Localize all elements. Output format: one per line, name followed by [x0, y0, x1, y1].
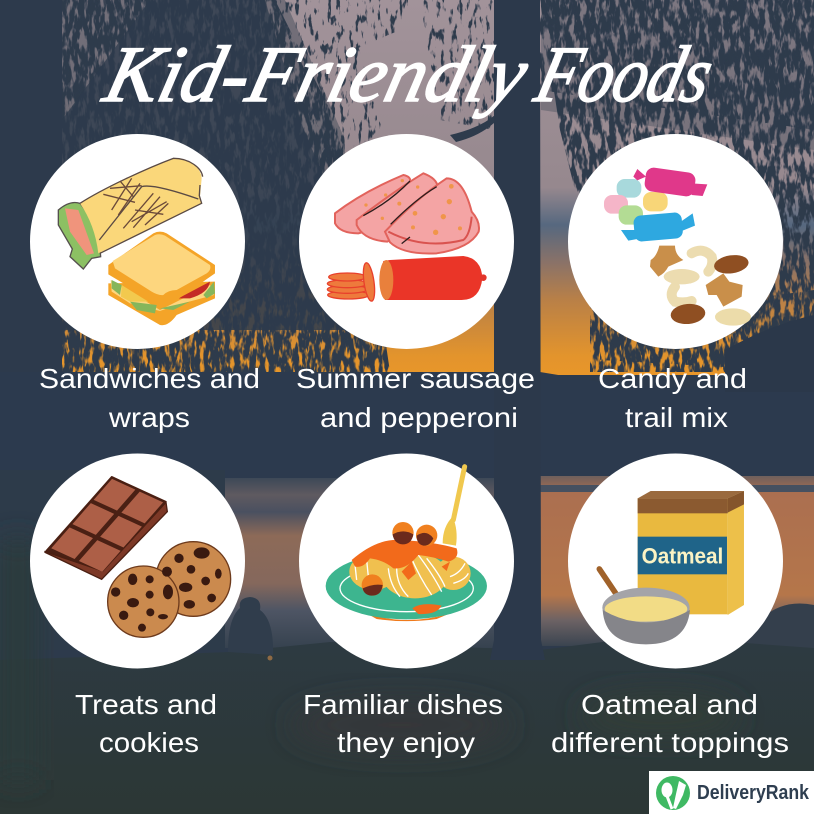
campfire glow [268, 656, 272, 660]
dark haze behind upper foliage [62, 0, 345, 330]
panel: summer sausage and pepperoni [296, 134, 535, 433]
icon: chocolate bar and cookies [45, 477, 231, 637]
label [303, 689, 503, 758]
circle background [568, 454, 783, 668]
label: Summer sausage [296, 363, 535, 394]
label: Candy and [598, 363, 747, 394]
label: Familiar dishes [303, 689, 503, 720]
icon: candy and nuts [604, 167, 751, 326]
panel: familiar dishes they enjoy [299, 454, 514, 758]
label: wraps [108, 402, 190, 433]
label: trail mix [625, 402, 728, 433]
panel: oatmeal and different toppings [551, 454, 789, 758]
label [598, 363, 747, 433]
label [39, 363, 260, 433]
solid left dark column [0, 0, 62, 372]
label [296, 363, 535, 433]
icon: green circle with spoon and fork [656, 776, 690, 810]
icon: oatmeal box and bowl [599, 491, 744, 644]
foliage: left pine tree [62, 0, 390, 372]
foliage: upper middle sprigs [420, 0, 494, 130]
circle background [30, 134, 245, 349]
circle background [299, 454, 514, 668]
circle background [30, 454, 245, 668]
label: they enjoy [337, 727, 475, 758]
label: Treats and [75, 689, 217, 720]
foliage: right pine tree [540, 0, 814, 372]
title: Foods [527, 30, 722, 119]
tree trunk [490, 0, 545, 660]
circle background [568, 134, 783, 349]
logo: DeliveryRank [649, 771, 814, 814]
label [551, 689, 789, 758]
person silhouette by the lake [228, 597, 273, 655]
icon: spaghetti and meatballs [326, 467, 487, 621]
label: cookies [99, 727, 199, 758]
label [75, 689, 217, 758]
panel: candy and trail mix [568, 134, 783, 433]
icon: sliced ham and sausage [327, 173, 487, 302]
icon: wrap and sandwich [58, 158, 215, 325]
title: Kid-Friendly [96, 30, 538, 119]
label: and pepperoni [320, 402, 518, 433]
label: different toppings [551, 727, 789, 758]
circle background [299, 134, 514, 349]
label: Oatmeal and [581, 689, 758, 720]
label: Sandwiches and [39, 363, 260, 394]
icon: oatmeal box and bowl: Oatmeal [642, 543, 723, 568]
panel: treats and cookies [30, 454, 245, 758]
panel: sandwiches and wraps [30, 134, 260, 433]
